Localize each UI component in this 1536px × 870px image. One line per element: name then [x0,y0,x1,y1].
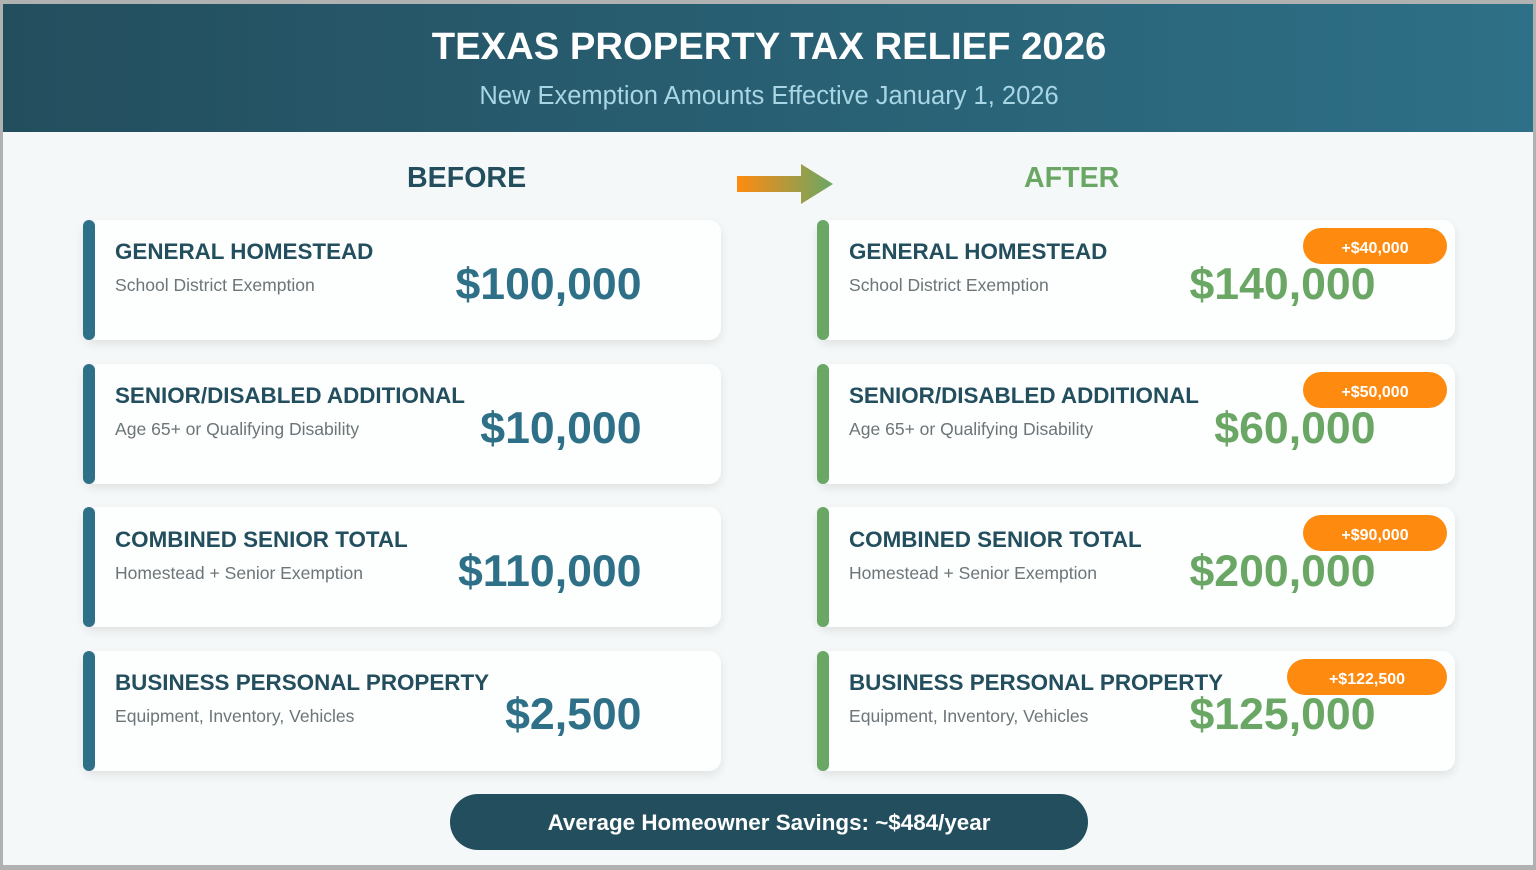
card value: $110,000 [458,547,642,596]
card value: $200,000 [1190,547,1376,596]
increase badge [1287,659,1447,695]
card description: Homestead + Senior Exemption [849,563,1097,583]
card: after combined senior total [817,507,1455,627]
card description: Equipment, Inventory, Vehicles [115,706,354,726]
card: after business personal property [817,651,1455,771]
header banner [3,4,1533,132]
card description: Homestead + Senior Exemption [115,563,363,583]
savings banner: Average Homeowner Savings: ~$484/year [548,810,990,835]
card title: BUSINESS PERSONAL PROPERTY [115,670,489,695]
card description: Age 65+ or Qualifying Disability [115,419,359,439]
card value: $140,000 [1190,260,1376,309]
savings banner [450,794,1088,850]
heading: after: AFTER [1024,162,1119,194]
increase badge: +$50,000 [1341,384,1409,401]
card description: School District Exemption [115,275,315,295]
card value: $10,000 [480,404,642,453]
card title: SENIOR/DISABLED ADDITIONAL [849,383,1199,408]
subtitle: New Exemption Amounts Effective January 1, 2026 [479,82,1059,110]
card title: GENERAL HOMESTEAD [849,239,1107,264]
card title: BUSINESS PERSONAL PROPERTY [849,670,1223,695]
icon: arrow from before to after [737,164,833,204]
card: before general homestead [83,220,721,340]
card: before combined senior total [83,507,721,627]
card title: COMBINED SENIOR TOTAL [849,527,1142,552]
card: before senior/disabled additional [83,364,721,484]
card value: $2,500 [505,690,642,739]
increase badge: +$40,000 [1341,240,1409,257]
heading: before: BEFORE [407,162,526,194]
increase badge [1303,228,1447,264]
increase badge [1303,372,1447,408]
card: after senior/disabled additional [817,364,1455,484]
card: before business personal property [83,651,721,771]
card description: Age 65+ or Qualifying Disability [849,419,1093,439]
increase badge: +$122,500 [1329,671,1405,688]
card description: Equipment, Inventory, Vehicles [849,706,1088,726]
card value: $100,000 [456,260,642,309]
card value: $125,000 [1190,690,1376,739]
card description: School District Exemption [849,275,1049,295]
card title: SENIOR/DISABLED ADDITIONAL [115,383,465,408]
card title: GENERAL HOMESTEAD [115,239,373,264]
card: after general homestead [817,220,1455,340]
title: TEXAS PROPERTY TAX RELIEF 2026 [432,25,1106,68]
increase badge [1303,515,1447,551]
card title: COMBINED SENIOR TOTAL [115,527,408,552]
card value: $60,000 [1214,404,1376,453]
increase badge: +$90,000 [1341,527,1409,544]
